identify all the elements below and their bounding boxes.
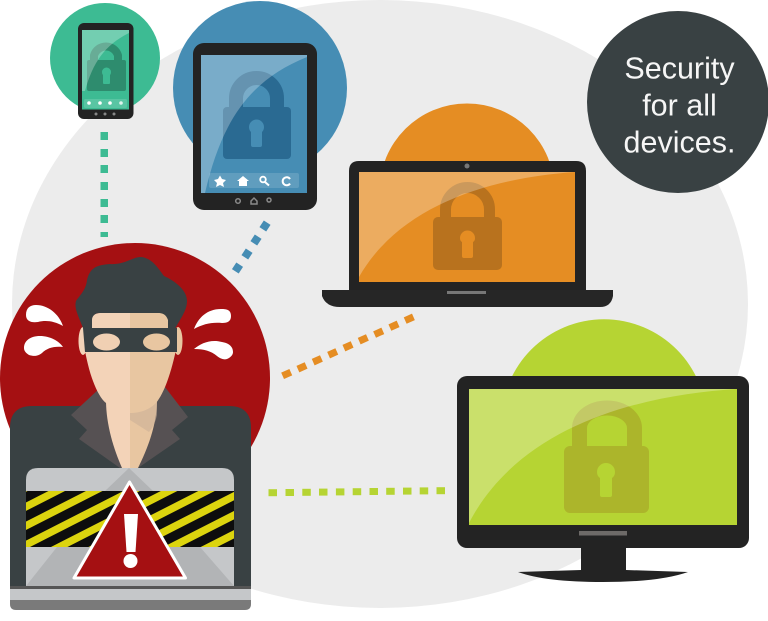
badge circle [587, 11, 768, 193]
phone group [50, 3, 160, 119]
laptop screen [359, 172, 575, 282]
tablet toolbar [209, 173, 299, 188]
laptop lid [349, 161, 586, 291]
phone toolbar [84, 99, 127, 108]
desktop circle [501, 319, 707, 525]
phone screen [82, 30, 129, 110]
laptop base [10, 586, 251, 610]
ears [78, 327, 182, 355]
tablet circle [173, 1, 347, 175]
eyes [93, 334, 170, 350]
laptop lock [433, 188, 502, 270]
laptop lid [26, 468, 234, 586]
dotted connector: desktop [268, 487, 445, 496]
hair [75, 257, 187, 329]
tablet buttons [236, 198, 271, 204]
face [84, 313, 177, 413]
warning triangle [74, 482, 186, 578]
jacket [10, 406, 251, 592]
neck [106, 400, 157, 468]
caption text line 3: devices. [624, 126, 735, 160]
laptop group [322, 104, 613, 307]
laptop base [322, 290, 613, 307]
laptop glare [359, 172, 575, 277]
phone buttons [94, 112, 116, 116]
desktop glare [469, 389, 737, 523]
collar [71, 387, 188, 468]
desktop body [457, 376, 749, 548]
desktop screen [469, 389, 737, 525]
dotted connector: tablet [232, 220, 271, 274]
tablet glare [201, 55, 307, 193]
desktop group [457, 319, 749, 582]
tablet screen [201, 55, 307, 193]
laptop circle [380, 104, 554, 278]
mask [83, 328, 177, 352]
hazard stripes [26, 491, 234, 547]
tablet lock [223, 78, 291, 159]
phone lock [87, 47, 126, 91]
phone body [78, 23, 134, 119]
laptop trackpad notch [447, 291, 486, 294]
dotted connector: laptop [281, 314, 415, 379]
caption text: Security [624, 52, 735, 86]
sweat drops [24, 305, 233, 359]
desktop indicator [579, 531, 627, 536]
red circle [0, 243, 270, 513]
caption text line 2: for all [642, 88, 717, 122]
caption badge [587, 11, 768, 193]
laptop camera [464, 164, 470, 168]
exclamation mark [124, 514, 138, 568]
phone glare [82, 30, 129, 91]
tablet group [173, 1, 347, 210]
dotted connector: phone [100, 132, 108, 237]
desktop lock [564, 408, 649, 513]
hacker group [0, 243, 270, 610]
tablet body [193, 43, 317, 210]
phone circle [50, 3, 160, 113]
laptop inner shading [26, 468, 234, 586]
desktop stand [518, 546, 688, 582]
